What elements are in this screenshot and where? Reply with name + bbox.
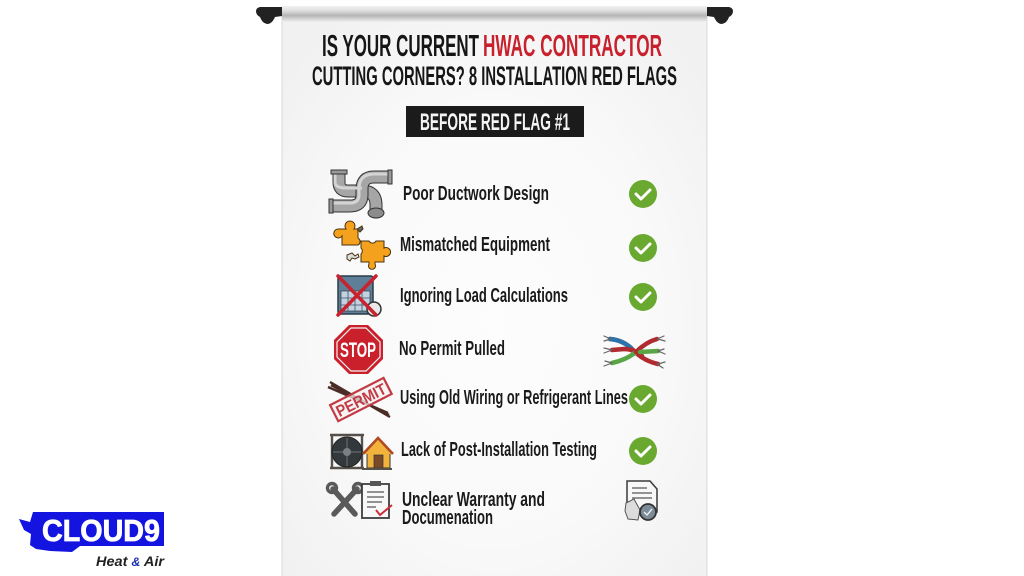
icon: load calculations crossed out [338, 276, 381, 316]
title [312, 28, 677, 91]
row 4 label: No Permit Pulled [399, 338, 505, 360]
row 2 label: Mismatched Equipment [400, 234, 550, 256]
icon: ductwork pipes [329, 170, 392, 218]
icon: mismatched puzzle pieces [334, 221, 391, 269]
title: CUTTING CORNERS? 8 INSTALLATION RED FLAGS [312, 61, 677, 91]
row 6 label: Lack of Post-Installation Testing [401, 439, 597, 461]
poster banner [282, 6, 707, 576]
logo: Cloud9 Heat & Air [19, 512, 166, 569]
icon: stop sign [334, 325, 383, 374]
badge: before red flag #1: BEFORE RED FLAG #1 [420, 109, 570, 136]
icon: stop sign: STOP [340, 339, 376, 362]
check icon row 5 [629, 385, 657, 413]
logo: Cloud9 Heat & Air: CLOUD9 [42, 513, 160, 548]
badge: before red flag #1 [406, 106, 584, 137]
check icon row 1 [629, 180, 657, 208]
check icon row 2 [629, 234, 657, 262]
title: IS YOUR CURRENT [322, 28, 479, 63]
icon: tools and clipboard [328, 481, 392, 518]
icon: tangled coloured wires [604, 336, 665, 368]
check icon row 6 [629, 437, 657, 465]
row 5 label: Using Old Wiring or Refrigerant Lines [400, 387, 628, 409]
check icon row 3 [629, 283, 657, 311]
row 7 label [402, 489, 545, 529]
left hanger bracket [256, 7, 282, 24]
icon: permit stamp over old wiring: PERMIT [334, 381, 390, 421]
title: HWAC CONTRACTOR [483, 28, 662, 63]
icon: document with seal [625, 481, 657, 520]
icon: outdoor condenser and house [330, 435, 393, 469]
right hanger bracket [707, 7, 733, 24]
row 1 label: Poor Ductwork Design [403, 183, 549, 205]
row 7 label: Unclear Warranty and [402, 489, 545, 511]
row 7 label: Documenation [402, 507, 493, 529]
row 3 label: Ignoring Load Calculations [400, 285, 568, 307]
logo: Cloud9 Heat & Air: Heat & Air [96, 553, 166, 569]
